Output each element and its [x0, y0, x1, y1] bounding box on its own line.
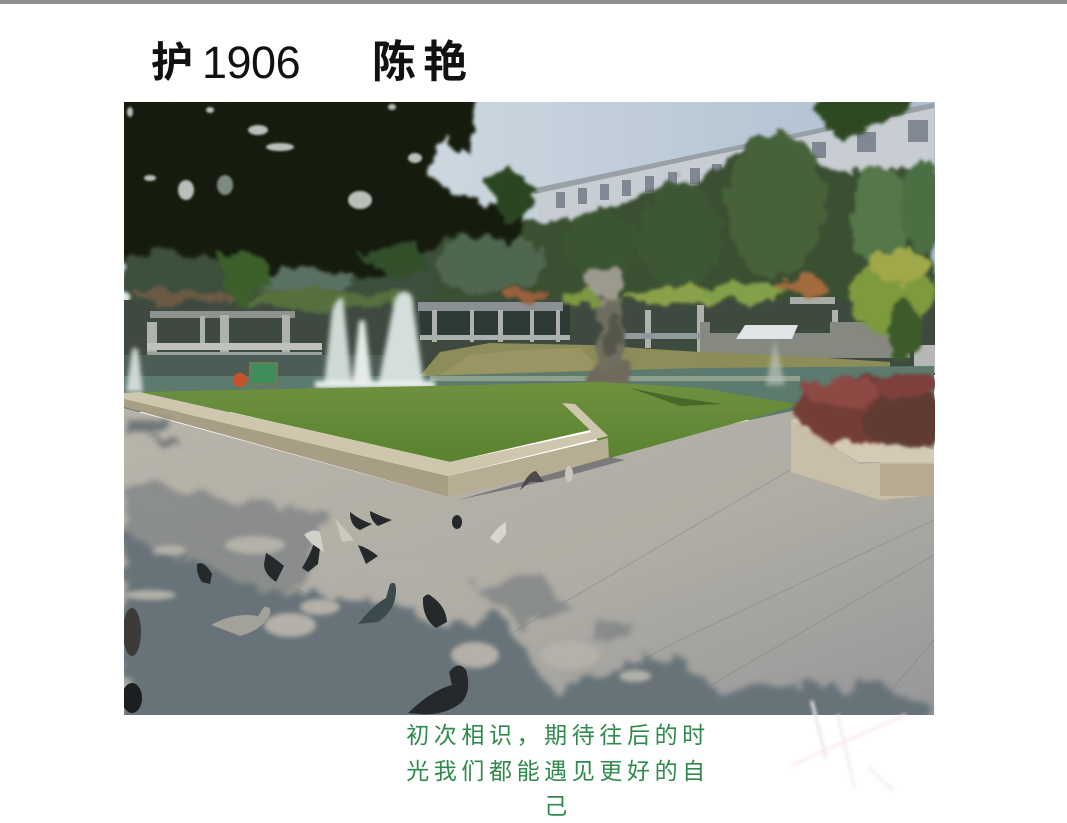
raised lawn kerb: [124, 392, 625, 500]
lawn: [142, 382, 800, 462]
photo: campus square with fountain: [124, 102, 935, 715]
green sign: [233, 362, 278, 390]
caption: 初次相识，期待往后的时: [406, 716, 710, 750]
background trees and willows: [124, 132, 942, 310]
pink stamp mark: [792, 698, 908, 790]
sky: [124, 102, 935, 302]
rockery sculpture: [584, 265, 634, 391]
pavilion corridor: [124, 297, 935, 376]
building: [535, 103, 934, 225]
water fountain: [126, 291, 785, 392]
pavement: [124, 408, 934, 715]
planter with red shrubs: [791, 373, 947, 500]
top grey bar: [0, 0, 1067, 4]
title: 护: [151, 39, 193, 86]
light patches in shadow: [124, 536, 651, 682]
info board: [736, 325, 798, 339]
title: [151, 37, 474, 88]
paving seams: [124, 470, 934, 715]
caption: [406, 716, 710, 821]
shadow on lawn: [630, 388, 722, 406]
title: 1906: [202, 37, 300, 88]
sky holes in canopy: [127, 104, 422, 209]
vine canopy: [130, 249, 932, 362]
caption: 己: [544, 787, 572, 821]
caption: 光我们都能遇见更好的自: [406, 752, 710, 786]
foreground tree canopy: [115, 95, 912, 303]
title: 陈艳: [372, 38, 474, 87]
pigeons: [122, 466, 573, 714]
tree shadows on pavement: [124, 416, 934, 740]
pond and far lawn: [124, 343, 934, 420]
